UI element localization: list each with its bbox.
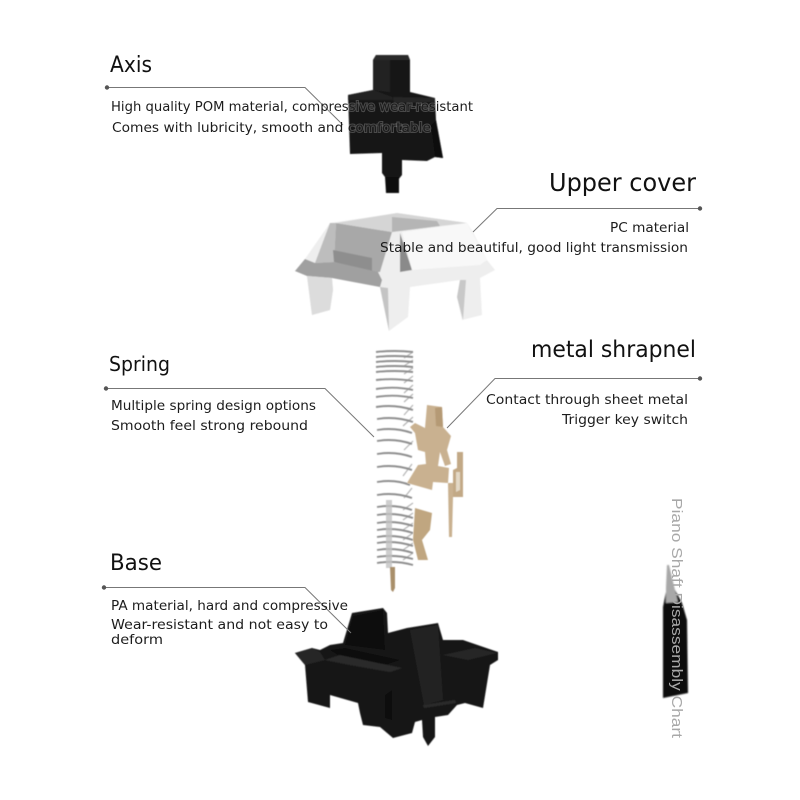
text block: base description: deform xyxy=(111,632,163,648)
text block: axis description xyxy=(111,99,473,136)
leader dot: axis xyxy=(105,85,109,90)
heading: metal shrapnel: metal shrapnel xyxy=(531,337,696,363)
leader line: upper cover xyxy=(473,208,700,232)
text block: shrapnel description: Trigger key switch xyxy=(561,412,688,428)
leader line: metal shrapnel xyxy=(447,378,700,428)
heading: Axis: Axis xyxy=(110,53,152,78)
leader line: axis xyxy=(107,88,343,125)
text block: spring description: Multiple spring design options xyxy=(111,398,316,414)
part: base xyxy=(295,608,498,746)
heading: Spring: Spring xyxy=(109,352,170,376)
decoration: black smear xyxy=(663,565,688,698)
part: metal shrapnel xyxy=(407,405,463,560)
heading: Base: Base xyxy=(110,551,162,576)
text block: base description: Wear-resistant and not easy to xyxy=(111,617,328,633)
part: axis stem xyxy=(348,55,443,193)
part: spring xyxy=(376,351,413,592)
text block: upper cover description xyxy=(380,220,689,256)
leader dot: upper cover xyxy=(698,206,702,211)
text block: base description xyxy=(111,598,348,648)
vertical caption: Piano Shaft Disassembly Chart xyxy=(668,498,685,739)
text block: base description: PA material, hard and compressive xyxy=(111,598,348,614)
text block: upper cover description: PC material xyxy=(610,220,689,236)
leader dot: spring xyxy=(104,386,108,391)
text block: shrapnel description: Contact through sheet metal xyxy=(486,392,688,408)
leader line: spring xyxy=(106,388,374,437)
leader line: base xyxy=(104,588,351,633)
text block: spring description xyxy=(111,398,316,434)
part: upper cover xyxy=(295,213,495,331)
leader dot: metal shrapnel xyxy=(698,376,702,381)
text block: upper cover description: Stable and beautiful, good light transmission xyxy=(380,240,688,256)
text block: spring description: Smooth feel strong rebound xyxy=(111,418,308,434)
leader dot: base xyxy=(102,585,106,590)
text block: axis description: High quality POM material, compressive wear-resistant xyxy=(111,99,473,115)
heading: Upper cover: Upper cover xyxy=(549,168,697,197)
text block: shrapnel description xyxy=(486,392,688,428)
text block: axis description: Comes with lubricity, smooth and comfortable xyxy=(112,120,431,136)
